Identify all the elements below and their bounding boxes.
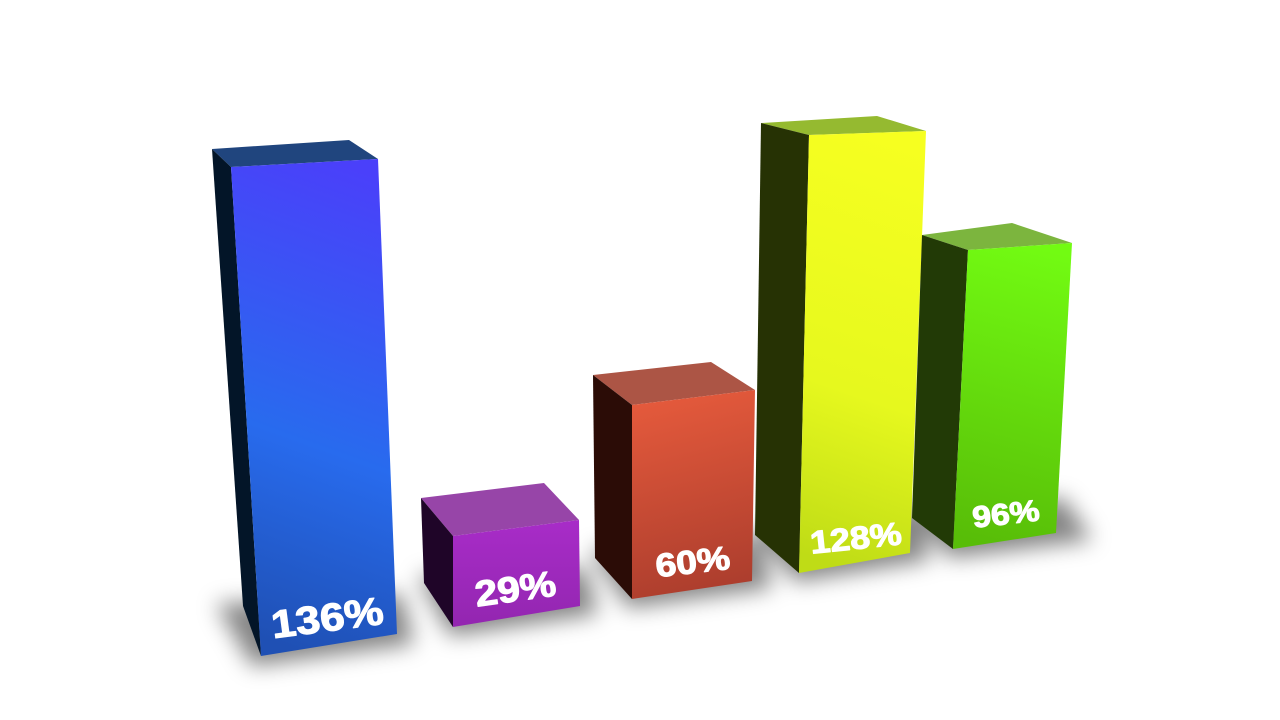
label: 128%: 128% — [808, 516, 903, 561]
bar: blue 136% — [212, 140, 397, 656]
label: 60%: 60% — [654, 540, 732, 585]
bar: purple 29% — [421, 483, 580, 627]
bar: green 96% — [912, 223, 1072, 549]
label: 29%: 29% — [472, 564, 558, 615]
bar: red 60% — [593, 362, 755, 599]
floor shadows — [216, 498, 1092, 666]
label: 136%: 136% — [268, 588, 386, 647]
bar: yellow 128% — [755, 116, 926, 573]
label: 96%: 96% — [971, 493, 1041, 534]
